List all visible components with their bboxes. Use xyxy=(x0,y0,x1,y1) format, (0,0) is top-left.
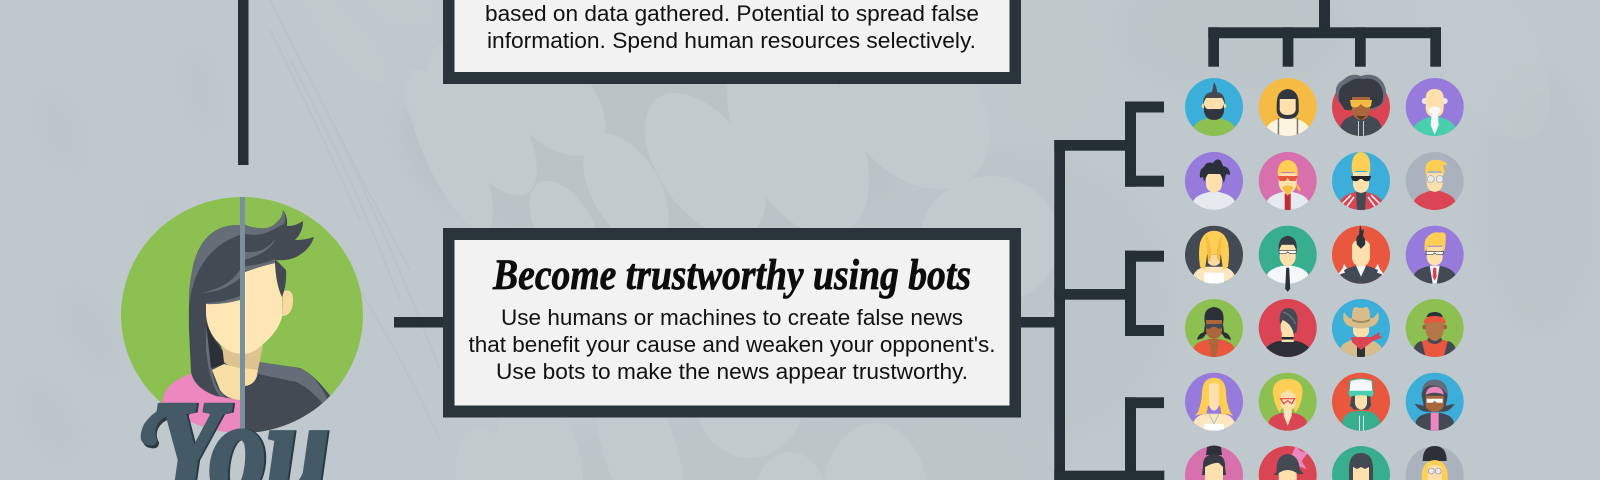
avatar: bearded man on blue xyxy=(1185,78,1243,136)
text: top box body: information. Spend human resources selectively. xyxy=(487,28,976,53)
text: middle box body: Use humans or machines to create false news xyxy=(501,305,963,330)
avatar: woman with long dark hair on green xyxy=(1332,446,1390,480)
avatar: long blond hair on dark xyxy=(1185,226,1243,284)
avatar: cowboy with red bandana on blue xyxy=(1332,299,1390,357)
avatar: dark skin woman with pink headband on blue xyxy=(1406,373,1464,431)
connector: vertical line from you up to top box xyxy=(238,0,248,165)
avatar: man with red headband on green xyxy=(1406,299,1464,357)
male hair xyxy=(245,210,314,297)
text: middle box body: Use bots to make the news appear trustworthy. xyxy=(496,359,968,384)
text: middle box body: that benefit your cause and weaken your opponent's. xyxy=(468,332,996,357)
avatar: blond man with red glasses on pink xyxy=(1259,152,1317,210)
avatar: girl in green hoodie and cap on orange xyxy=(1332,373,1390,431)
avatar: woman with dreadlocks and sunglasses on green xyxy=(1185,299,1243,357)
avatar: man with blond pompadour and sunglasses on blue xyxy=(1332,152,1390,210)
panel: middle strategy box xyxy=(443,228,1021,418)
text: top box body xyxy=(485,1,979,53)
avatar: blond bob woman with red glasses on green xyxy=(1259,373,1317,431)
avatar: man with glasses and black tie on green xyxy=(1259,226,1317,292)
panel: top strategy box xyxy=(443,0,1021,84)
avatar: punk with mohawk on orange xyxy=(1332,225,1390,284)
avatar: blond man in suit on purple xyxy=(1406,226,1464,284)
avatar: man with afro and yellow glasses on red xyxy=(1332,75,1390,136)
neck xyxy=(212,345,263,400)
avatar: bald old man with white beard on purple xyxy=(1406,78,1464,136)
avatar: emo woman with choker on red xyxy=(1259,299,1317,357)
tree connector: top bracket over avatars xyxy=(1208,0,1441,67)
avatar: blond man with round glasses on grey xyxy=(1406,152,1464,210)
tree connector: middle box to avatar groups xyxy=(1021,102,1164,480)
icon: you, split male and female portrait xyxy=(121,197,363,450)
connector: you to middle box xyxy=(394,317,444,328)
face xyxy=(206,262,293,354)
avatar: woman with pink bow on red xyxy=(1259,446,1317,480)
female hair xyxy=(189,225,240,400)
avatar: woman with long wavy blond hair on purple xyxy=(1185,373,1243,431)
heading: become trustworthy using bots: Become trustworthy using bots xyxy=(492,252,971,299)
divider line xyxy=(240,197,245,433)
avatar: man with messy black hair on purple xyxy=(1185,152,1243,210)
avatar: woman with black updo on pink xyxy=(1185,446,1243,480)
avatar: blond woman with black hat and glasses on grey xyxy=(1406,446,1464,480)
text: middle box body xyxy=(468,305,996,384)
text: top box body: based on data gathered. Potential to spread false xyxy=(485,1,979,26)
avatar: bearded man with suspenders on yellow xyxy=(1259,78,1317,136)
